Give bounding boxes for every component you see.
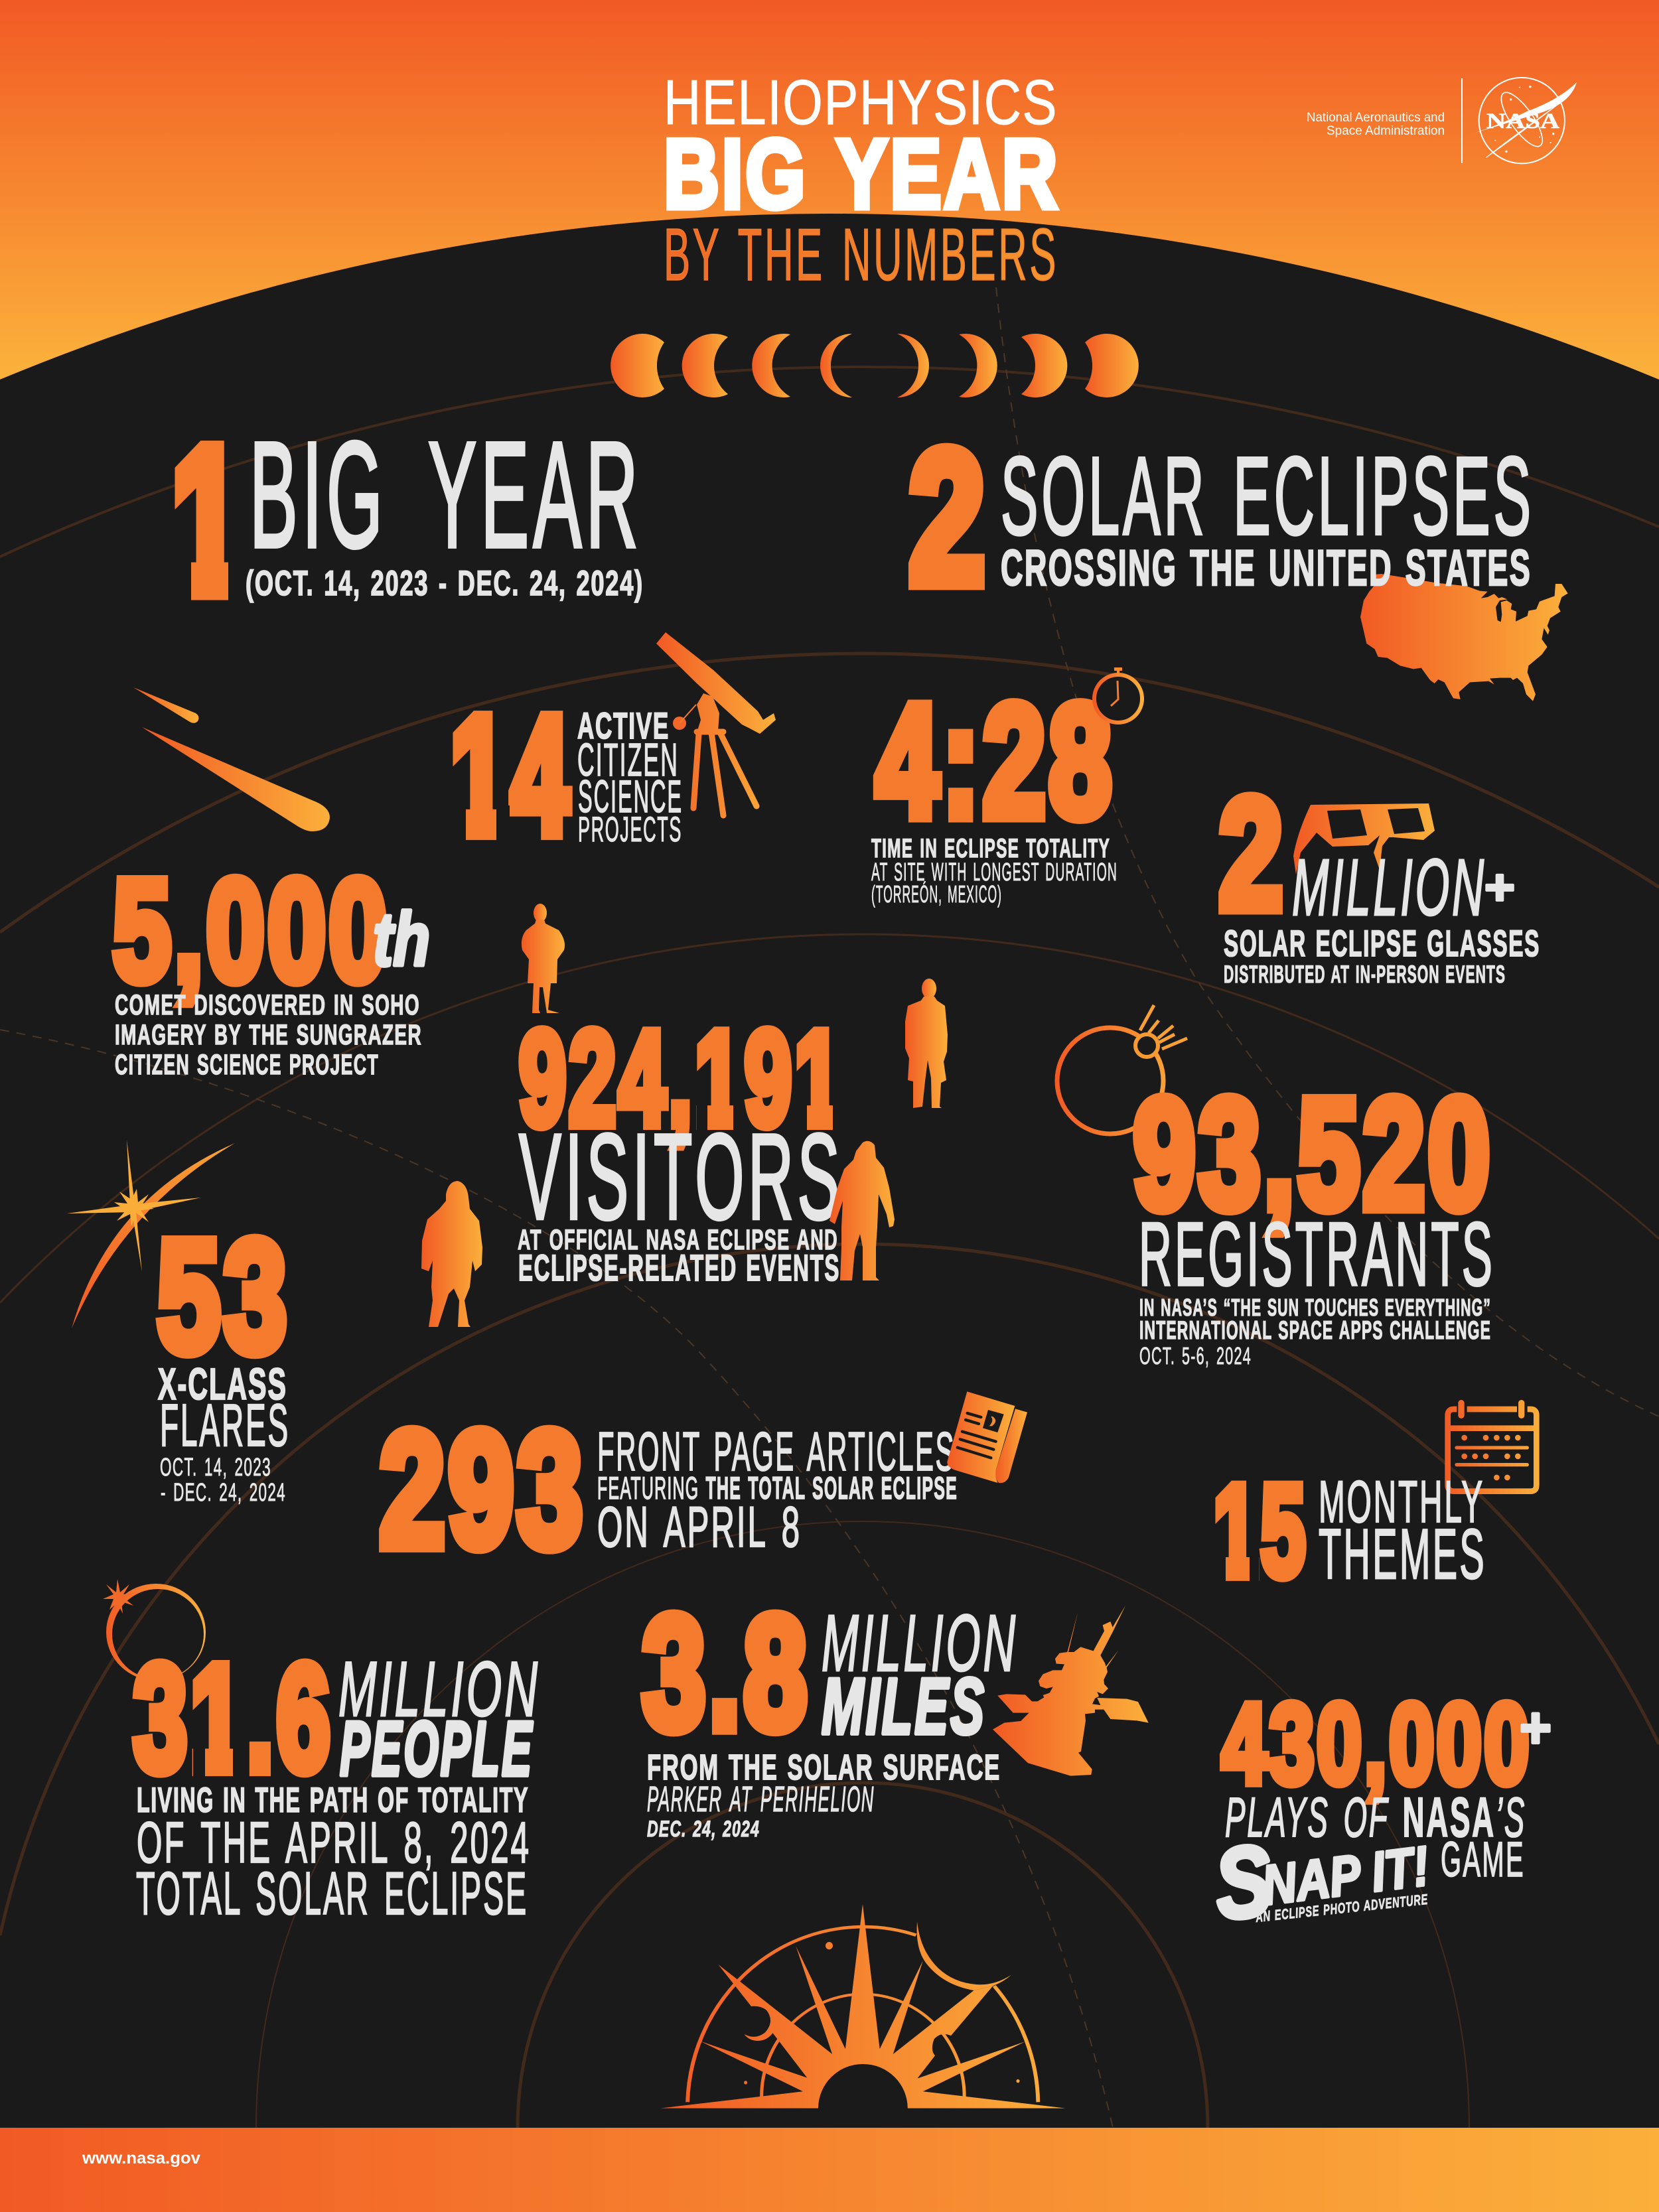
stat: 93,520 registrants bbox=[1133, 1066, 1495, 1369]
eclipse phases row bbox=[611, 334, 1139, 397]
stat: 14 citizen science projects bbox=[453, 711, 681, 843]
footer url: www.nasa.gov bbox=[82, 2149, 200, 2168]
icon: person silhouette, left bbox=[421, 1181, 482, 1327]
stat: 3.8 million miles: PARKER AT PERIHELION bbox=[647, 1779, 875, 1819]
NASA logo block bbox=[1307, 78, 1577, 163]
icon: eclipse glasses bbox=[1293, 803, 1435, 874]
stat: 2 million+ glasses: MILLION bbox=[1292, 842, 1486, 932]
logo: Snap It! game: S bbox=[1210, 1823, 1277, 1941]
stat: 3.8 million miles: MILLION bbox=[822, 1598, 1018, 1688]
stat: 1 big year: (OCT. 14, 2023 - DEC. 24, 2024) bbox=[246, 564, 644, 603]
stat: 2 million+ glasses: 2 bbox=[1219, 766, 1283, 942]
stat: 53 x-class flares: 53 bbox=[157, 1208, 290, 1385]
stat: 53 x-class flares: OCT. 14, 2023 bbox=[160, 1454, 271, 1482]
icon: eclipse ring with burst bbox=[103, 1579, 206, 1681]
stat: 53 x-class flares: FLARES bbox=[160, 1393, 290, 1459]
stat: 4:28 totality: (TORREÓN, MEXICO) bbox=[871, 880, 1002, 908]
stat: 293 front page articles: FEATURING THE TOTAL SOLAR ECLIPSE bbox=[597, 1470, 958, 1505]
text: BIG YEAR bbox=[250, 411, 642, 579]
stat: 14 citizen science projects: PROJECTS bbox=[578, 810, 682, 849]
stat: 2 million+ glasses: + bbox=[1484, 859, 1515, 915]
stat: 15 monthly themes bbox=[1215, 1480, 1483, 1582]
stat: 430,000+ plays: GAME bbox=[1441, 1832, 1525, 1887]
stat: 3.8 million miles: 3.8 bbox=[642, 1583, 810, 1763]
stat: 31.6 million people: TOTAL SOLAR ECLIPSE bbox=[136, 1860, 528, 1927]
stat: 15 monthly themes: MONTHLY bbox=[1319, 1468, 1484, 1535]
stat: 4:28 totality: TIME IN ECLIPSE TOTALITY bbox=[871, 834, 1110, 863]
stat: 293 front page articles: 293 bbox=[380, 1398, 586, 1581]
title: HELIOPHYSICS bbox=[664, 67, 1058, 138]
stat: 14 citizen science projects: CITIZEN bbox=[577, 734, 679, 786]
title bbox=[664, 67, 1060, 296]
icon: United States map bbox=[1360, 574, 1568, 701]
icon: ring with rays bbox=[1057, 1005, 1187, 1134]
stat: 5,000th comet: CITIZEN SCIENCE PROJECT bbox=[115, 1049, 379, 1081]
stat: 430,000+ plays: 430,000 bbox=[1222, 1681, 1532, 1807]
stat: 31.6 million people: PEOPLE bbox=[340, 1705, 534, 1792]
stat: 924,191 visitors: ECLIPSE-RELATED EVENTS bbox=[518, 1247, 840, 1288]
stat: 53 x-class flares: X-CLASS bbox=[158, 1359, 287, 1409]
logo: Snap It! game bbox=[1210, 1823, 1432, 1941]
stat: 430,000+ plays bbox=[1222, 1681, 1551, 1887]
stat: 93,520 registrants: 93,520 bbox=[1133, 1066, 1493, 1241]
stat: 3.8 million miles: DEC. 24, 2024 bbox=[647, 1817, 760, 1842]
icon: comet bbox=[133, 687, 330, 831]
stat: 4:28 totality: AT SITE WITH LONGEST DURATION bbox=[871, 859, 1118, 886]
icon: sun emblem bbox=[660, 1904, 1066, 2108]
stat: 93,520 registrants: OCT. 5-6, 2024 bbox=[1139, 1342, 1252, 1369]
stat: 924,191 visitors: 924,191 bbox=[519, 1003, 844, 1154]
footer bar bbox=[0, 2128, 1659, 2212]
NASA logo block: Space Administration bbox=[1327, 124, 1445, 138]
icon: solar flare star bbox=[67, 1140, 235, 1328]
stat: 31.6 million people: 31.6 bbox=[133, 1634, 333, 1803]
stat: 4:28 totality: 4:28 bbox=[876, 672, 1115, 851]
stat: 2 solar eclipses: 2 bbox=[909, 412, 985, 623]
NASA logo block: NASA bbox=[1486, 109, 1559, 133]
stat: 293 front page articles bbox=[380, 1398, 958, 1581]
stat: 14 citizen science projects: ACTIVE bbox=[577, 705, 670, 746]
logo: Snap It! game: AN ECLIPSE PHOTO ADVENTURE bbox=[1254, 1891, 1429, 1925]
sky gradient background bbox=[0, 0, 1659, 398]
stat: 53 x-class flares: - DEC. 24, 2024 bbox=[161, 1479, 286, 1507]
stat: 924,191 visitors bbox=[518, 1025, 839, 1282]
stat: 3.8 million miles: MILES bbox=[822, 1662, 986, 1751]
stat: 5,000th comet: COMET DISCOVERED IN SOHO bbox=[115, 989, 420, 1021]
stat: 924,191 visitors: AT OFFICIAL NASA ECLIPSE AND bbox=[518, 1224, 838, 1256]
stat: 293 front page articles: FRONT PAGE ARTICLES bbox=[597, 1420, 956, 1482]
icon: newspaper bbox=[947, 1391, 1027, 1483]
icon: person silhouette, top bbox=[522, 904, 565, 1013]
stat: 31.6 million people: OF THE APRIL 8, 2024 bbox=[137, 1811, 531, 1875]
stat: 31.6 million people: MILLION bbox=[338, 1645, 540, 1732]
stat: 31.6 million people: LIVING IN THE PATH OF TOTALITY bbox=[137, 1781, 529, 1820]
icon: person silhouette, right upper bbox=[905, 979, 948, 1108]
stat: 53 x-class flares bbox=[157, 1208, 290, 1507]
stat: 5,000th comet bbox=[113, 850, 430, 1081]
stat: 15 monthly themes: THEMES bbox=[1319, 1514, 1486, 1594]
stat: 924,191 visitors: VISITORS bbox=[519, 1108, 843, 1245]
stat: 1 big year bbox=[171, 405, 644, 636]
icon: Parker Solar Probe bbox=[993, 1606, 1149, 1776]
stat: 4:28 totality bbox=[871, 672, 1118, 908]
stat: 2 solar eclipses bbox=[909, 412, 1534, 623]
text: SCIENCE bbox=[578, 771, 683, 822]
stat: 5,000th comet: IMAGERY BY THE SUNGRAZER bbox=[115, 1019, 422, 1051]
NASA logo block: National Aeronautics and bbox=[1307, 111, 1445, 125]
stat: 31.6 million people bbox=[131, 1659, 538, 1916]
title: BY THE NUMBERS bbox=[664, 214, 1058, 296]
stat: 3.8 million miles: FROM THE SOLAR SURFACE bbox=[647, 1748, 1001, 1787]
icon: stopwatch bbox=[1094, 667, 1142, 723]
stat: 15 monthly themes: 15 bbox=[1213, 1458, 1308, 1604]
icon: person silhouette, right lower bbox=[830, 1141, 895, 1280]
stat: 5,000th comet: th bbox=[373, 898, 430, 982]
stat: 293 front page articles: ON APRIL 8 bbox=[597, 1495, 802, 1559]
logo: Snap It! game: NAP IT! bbox=[1259, 1834, 1432, 1917]
stat: 3.8 million miles bbox=[642, 1583, 1018, 1842]
icon: telescope bbox=[656, 632, 776, 815]
icon: calendar bbox=[1448, 1400, 1536, 1491]
stat: 1 big year: 1 bbox=[171, 405, 243, 636]
stat: 2 million+ glasses bbox=[1219, 766, 1540, 988]
title: BIG YEAR bbox=[664, 119, 1060, 229]
stat: 430,000+ plays: + bbox=[1520, 1696, 1551, 1760]
stat: 5,000th comet: 5,000 bbox=[113, 850, 390, 1010]
stat: 430,000+ plays: PLAYS OF NASA’S bbox=[1225, 1786, 1526, 1848]
stat: 14 citizen science projects: 14 bbox=[450, 681, 572, 869]
